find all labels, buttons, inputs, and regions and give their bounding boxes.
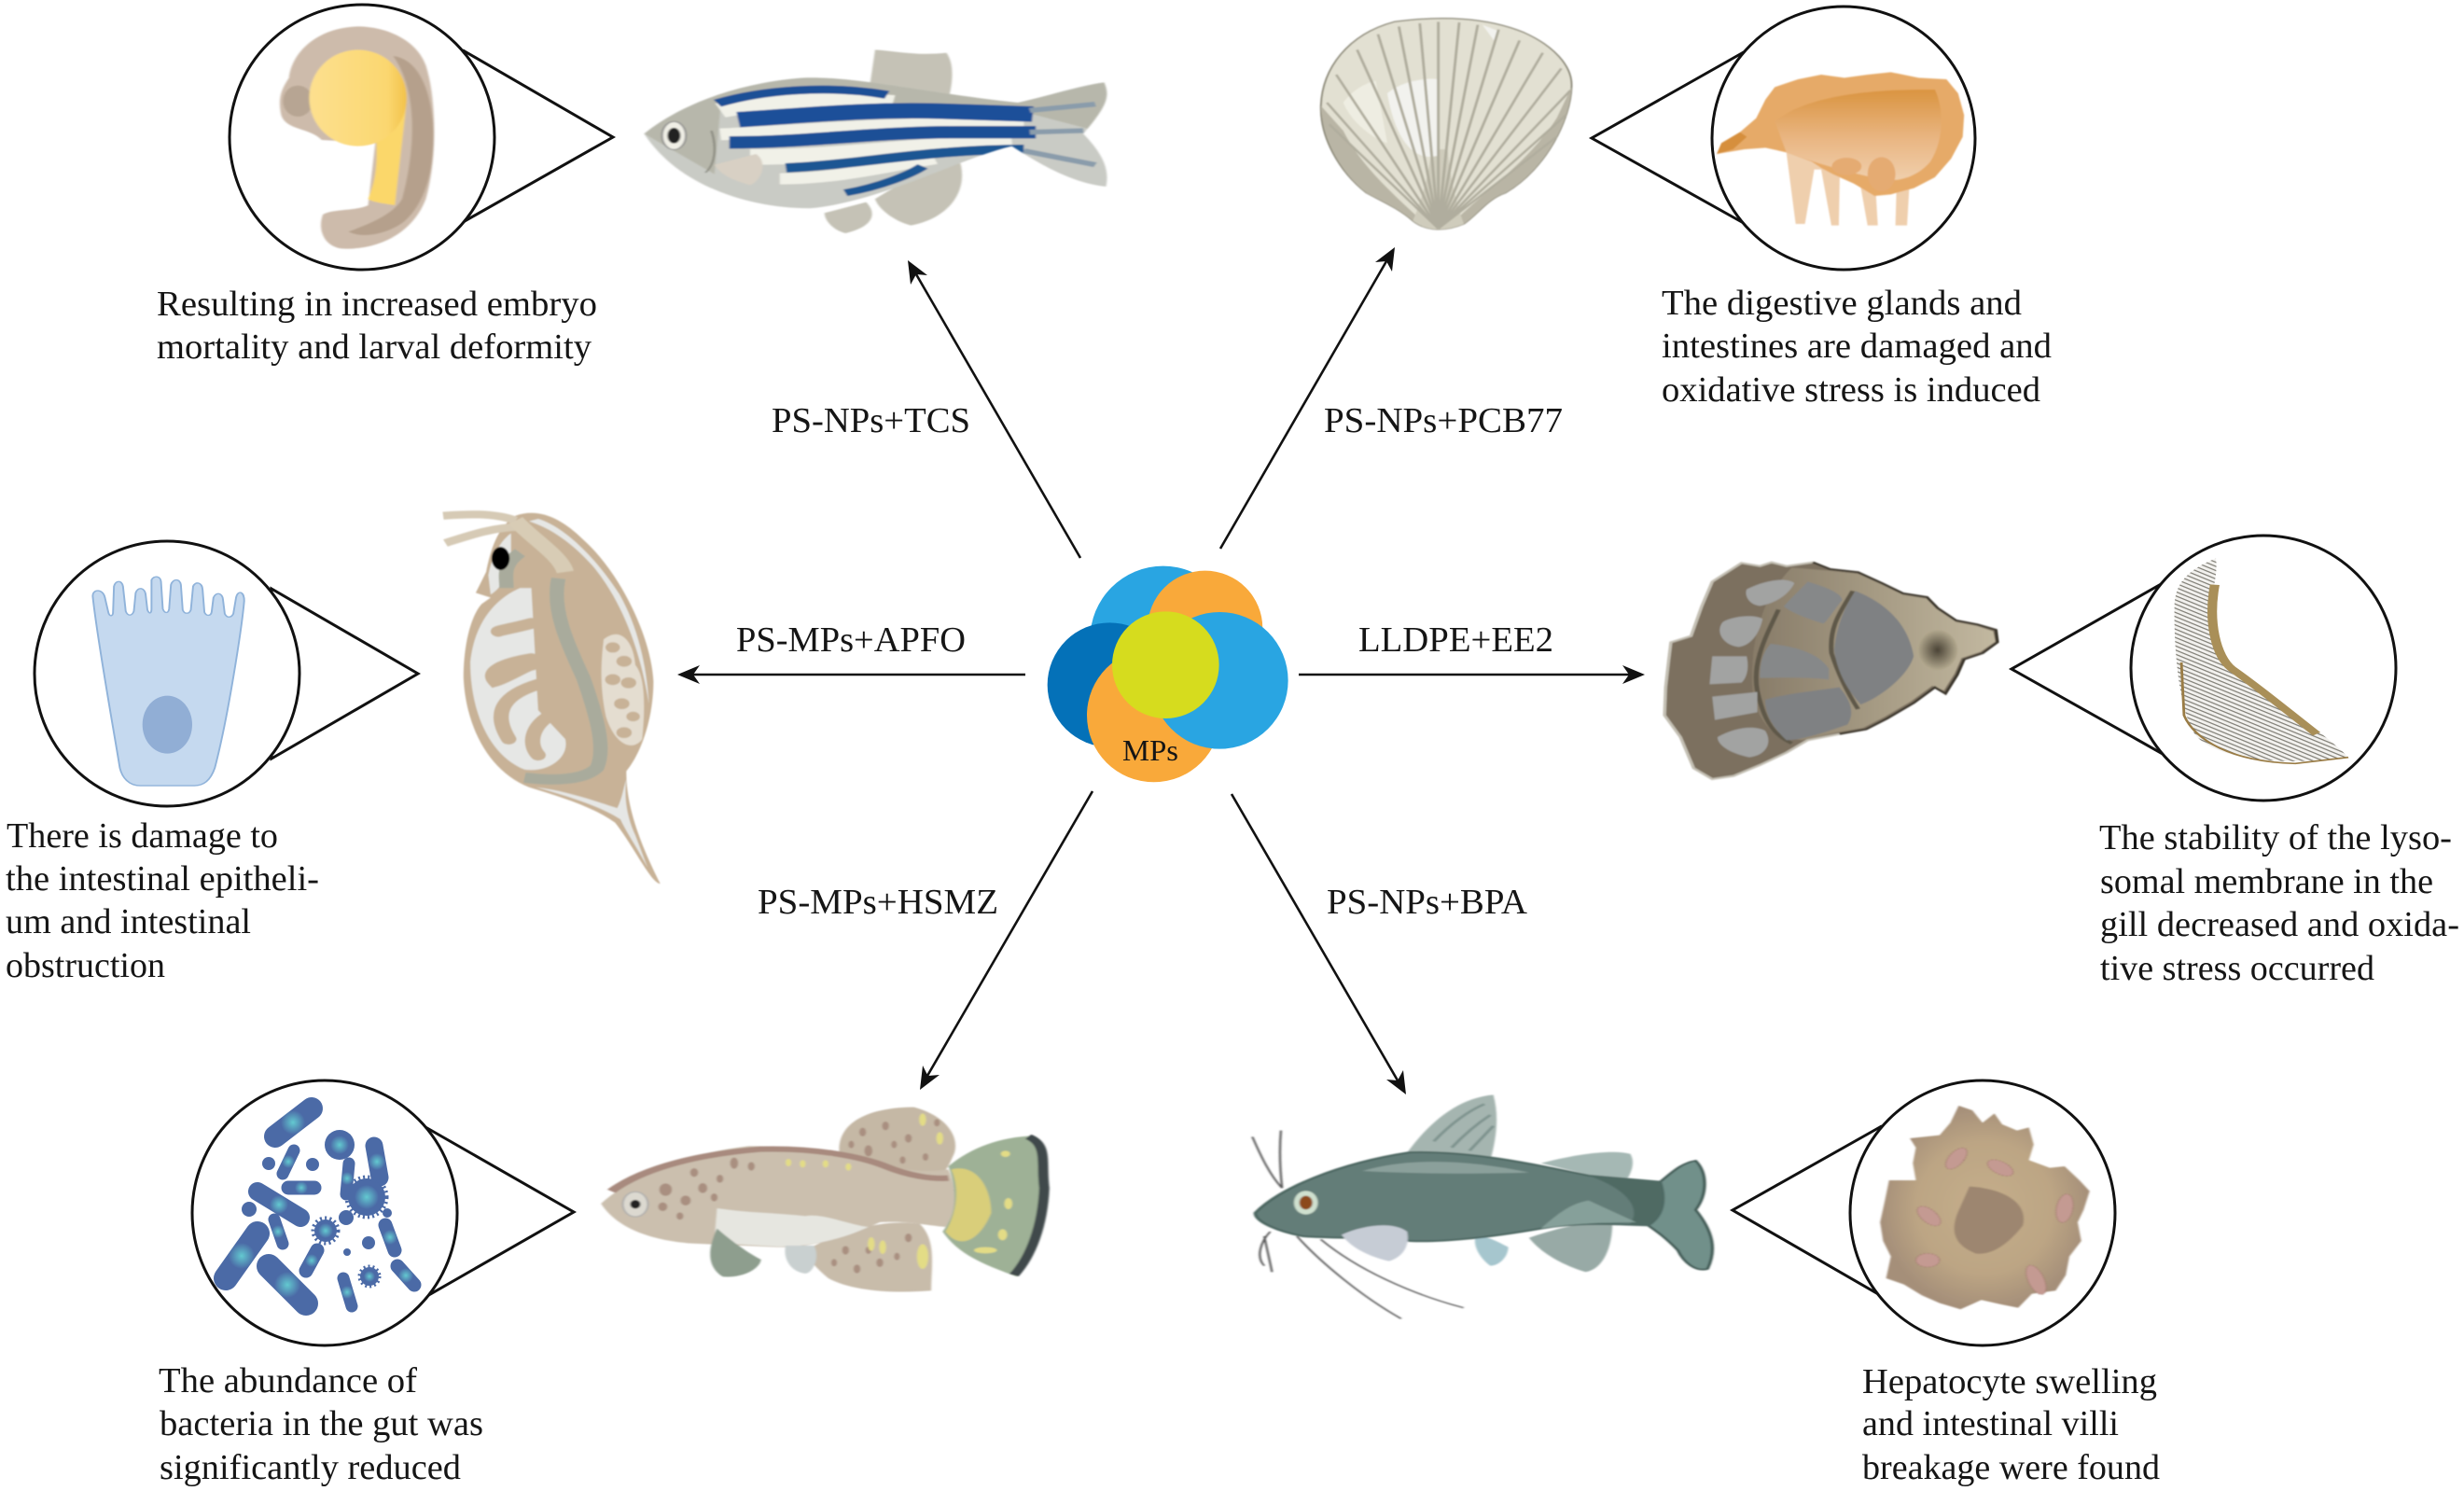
callout: gut bacteria zoom circle bbox=[192, 1080, 574, 1345]
arrow: MPs to zebrafish bbox=[908, 260, 1080, 558]
icon: clam shell bbox=[1321, 19, 1571, 230]
arrow: MPs to daphnia bbox=[677, 665, 1025, 684]
arrow: MPs to killifish bbox=[920, 791, 1093, 1090]
panel: oyster, LLDPE+EE2 bbox=[1299, 536, 2459, 988]
text: catfish effect: and intestinal villi bbox=[1862, 1404, 2119, 1443]
text: oyster effect: somal membrane in the bbox=[2100, 862, 2433, 901]
label: LLDPE+EE2: LLDPE+EE2 bbox=[1358, 620, 1553, 660]
icon: zebrafish embryo bbox=[280, 26, 434, 249]
label: MPs: MPs bbox=[1122, 733, 1178, 767]
panel: catfish, PS-NPs+BPA bbox=[1232, 794, 2160, 1487]
icon: epithelial cell bbox=[92, 577, 244, 786]
callout: gill zoom circle bbox=[2012, 536, 2396, 801]
panel: daphnia, PS-MPs+APFO bbox=[6, 513, 1025, 985]
text: oyster effect: The stability of the lyso- bbox=[2099, 818, 2452, 857]
icon: gill section bbox=[2175, 558, 2348, 763]
text: catfish effect: breakage were found bbox=[1862, 1448, 2160, 1487]
icon: catfish bbox=[1252, 1094, 1712, 1318]
text: killifish effect: significantly reduced bbox=[160, 1448, 461, 1487]
icon: killifish bbox=[601, 1108, 1049, 1292]
text: clam effect: The digestive glands and bbox=[1662, 284, 2022, 323]
central MPs cluster bbox=[1048, 566, 1288, 782]
text: embryo effect: Resulting in increased embryo bbox=[157, 285, 597, 324]
label: PS-NPs+TCS: PS-NPs+TCS bbox=[772, 401, 970, 440]
label: PS-NPs+PCB77: PS-NPs+PCB77 bbox=[1324, 401, 1563, 440]
text: catfish effect: Hepatocyte swelling bbox=[1862, 1362, 2157, 1401]
label: PS-MPs+HSMZ: PS-MPs+HSMZ bbox=[758, 883, 998, 922]
text: daphnia effect: obstruction bbox=[6, 946, 165, 985]
icon: oyster bbox=[1664, 563, 1998, 779]
label: PS-NPs+BPA: PS-NPs+BPA bbox=[1327, 883, 1528, 922]
text: daphnia effect: There is damage to bbox=[7, 816, 278, 856]
callout: intestinal epithelium zoom circle bbox=[35, 541, 418, 806]
text: oyster effect: tive stress occurred bbox=[2100, 949, 2374, 988]
text: daphnia effect: um and intestinal bbox=[6, 902, 251, 941]
callout: digestive gland zoom circle bbox=[1592, 7, 1975, 270]
text: clam effect: oxidative stress is induced bbox=[1662, 370, 2040, 410]
text: embryo effect: mortality and larval deformity bbox=[157, 327, 592, 367]
text: killifish effect: The abundance of bbox=[159, 1361, 417, 1400]
text: daphnia effect: the intestinal epitheli- bbox=[6, 859, 319, 899]
icon: daphnia bbox=[443, 513, 661, 884]
text: oyster effect: gill decreased and oxida- bbox=[2100, 905, 2459, 944]
icon: zebrafish bbox=[644, 49, 1107, 233]
panel: clam, PS-NPs+PCB77 bbox=[1220, 7, 2052, 549]
panel: killifish, PS-MPs+HSMZ bbox=[159, 791, 1093, 1487]
label: PS-MPs+APFO: PS-MPs+APFO bbox=[736, 620, 966, 660]
text: killifish effect: bacteria in the gut was bbox=[160, 1404, 483, 1443]
callout: embryo zoom circle bbox=[230, 5, 613, 270]
arrow: MPs to oyster bbox=[1299, 665, 1645, 684]
arrow: MPs to catfish bbox=[1232, 794, 1406, 1094]
panel: zebrafish, PS-NPs+TCS bbox=[157, 5, 1107, 558]
icon: gut bacteria bbox=[226, 1108, 414, 1306]
icon: liver tissue bbox=[1880, 1106, 2090, 1309]
icon: digestive gland bbox=[1717, 72, 1964, 226]
callout: liver zoom circle bbox=[1733, 1080, 2115, 1345]
text: clam effect: intestines are damaged and bbox=[1662, 327, 2052, 366]
arrow: MPs to clam bbox=[1220, 247, 1395, 549]
